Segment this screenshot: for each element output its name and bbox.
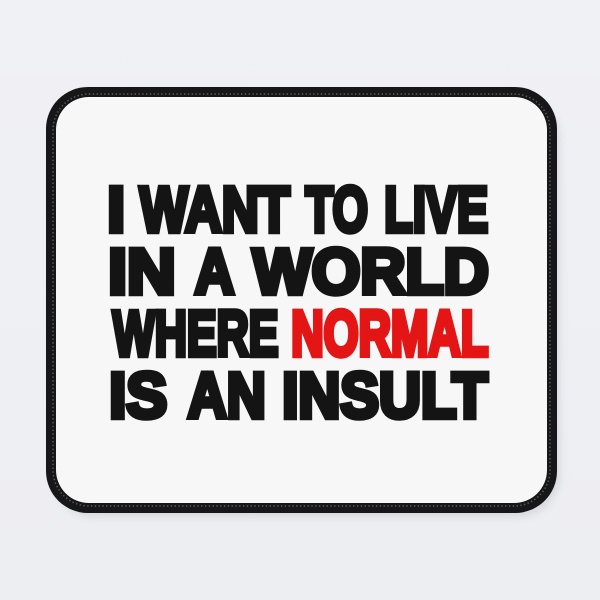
stitched black border (46, 87, 557, 513)
line 2: IN (108, 236, 176, 308)
line 4: INSULT (282, 360, 488, 432)
mat shadow (52, 96, 560, 517)
slogan text (107, 174, 489, 432)
line 1: I (107, 174, 125, 246)
line 2 (108, 236, 489, 308)
stitching detail (53, 94, 550, 506)
white mat surface (56, 97, 547, 503)
line 1 (107, 174, 488, 246)
line 1: LIVE (384, 174, 488, 246)
line 2: WORLD (253, 236, 489, 308)
line 4: IS (109, 360, 167, 432)
line 4 (109, 360, 488, 432)
line 4: AN (188, 360, 266, 432)
mouse pad (46, 87, 557, 513)
line 1: WANT (140, 174, 290, 246)
line 2: A (195, 236, 234, 308)
line 3 red word: NORMAL (291, 298, 488, 370)
line 1: TO (306, 174, 368, 246)
line 3 black word: WHERE (113, 298, 278, 370)
